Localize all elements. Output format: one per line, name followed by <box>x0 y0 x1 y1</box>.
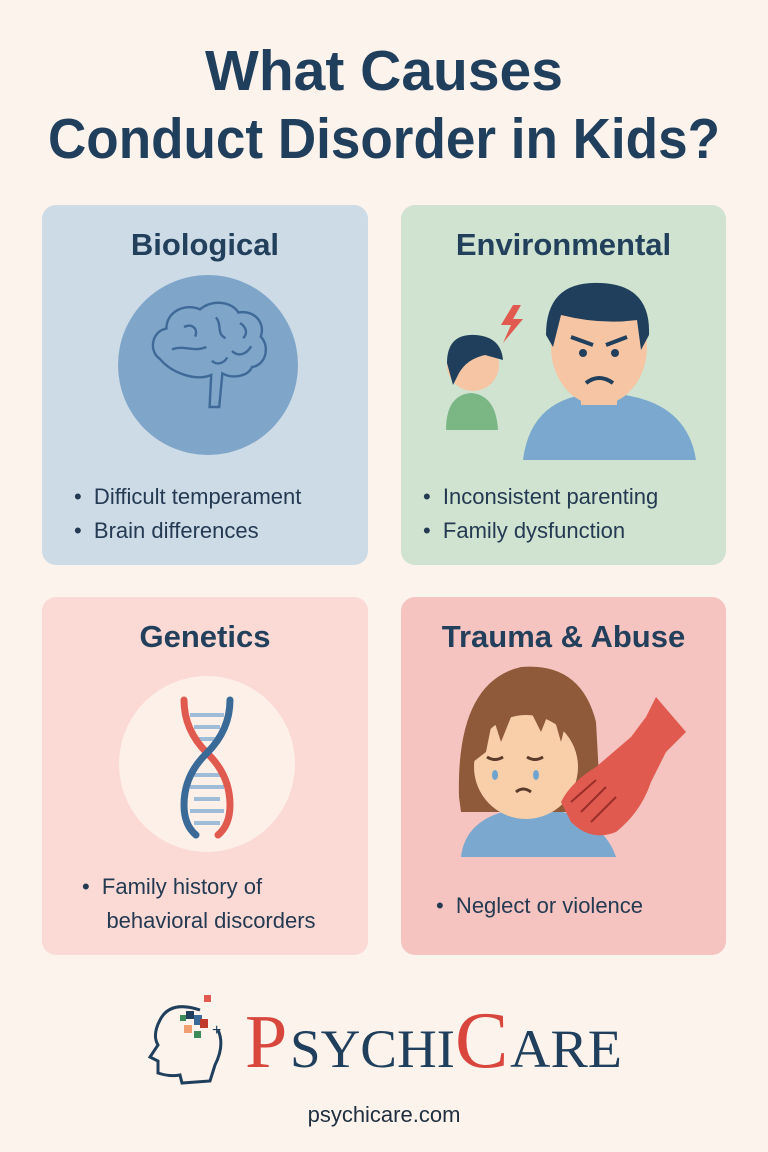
bullets: biological <box>74 484 302 543</box>
title: Conduct Disorder in Kids? <box>48 107 720 170</box>
heading: trauma: Trauma & Abuse <box>442 619 685 654</box>
icon: brain <box>118 275 298 455</box>
illustration: crying girl and hand <box>458 666 686 857</box>
bullets: environmental <box>423 484 658 543</box>
icon: head: + <box>212 1022 221 1039</box>
bullets: environmental: • Inconsistent parenting <box>423 484 658 509</box>
bullets: genetics: • Family history of <box>82 874 262 899</box>
title <box>48 39 720 170</box>
bullets: biological: • Difficult temperament <box>74 484 301 509</box>
heading: environmental: Environmental <box>456 227 671 262</box>
bullets: genetics <box>82 874 316 933</box>
heading: genetics: Genetics <box>140 619 270 654</box>
title: What Causes <box>205 39 563 103</box>
bullets: environmental: • Family dysfunction <box>423 518 625 543</box>
panel: biological <box>42 205 368 565</box>
illustration: angry adult and child <box>446 282 696 460</box>
panel: trauma <box>401 597 726 955</box>
icon: head <box>148 995 222 1085</box>
logo text <box>245 997 622 1075</box>
logo: psychicare <box>148 995 622 1085</box>
icon: dna <box>119 676 295 852</box>
bullets: genetics: behavioral discorders <box>106 908 316 933</box>
panel: genetics <box>42 597 368 955</box>
heading: biological: Biological <box>131 227 279 262</box>
bullets: biological: • Brain differences <box>74 518 259 543</box>
website url: psychicare.com <box>308 1102 460 1127</box>
panel: environmental <box>401 205 726 565</box>
bullets: trauma: • Neglect or violence <box>436 893 643 918</box>
